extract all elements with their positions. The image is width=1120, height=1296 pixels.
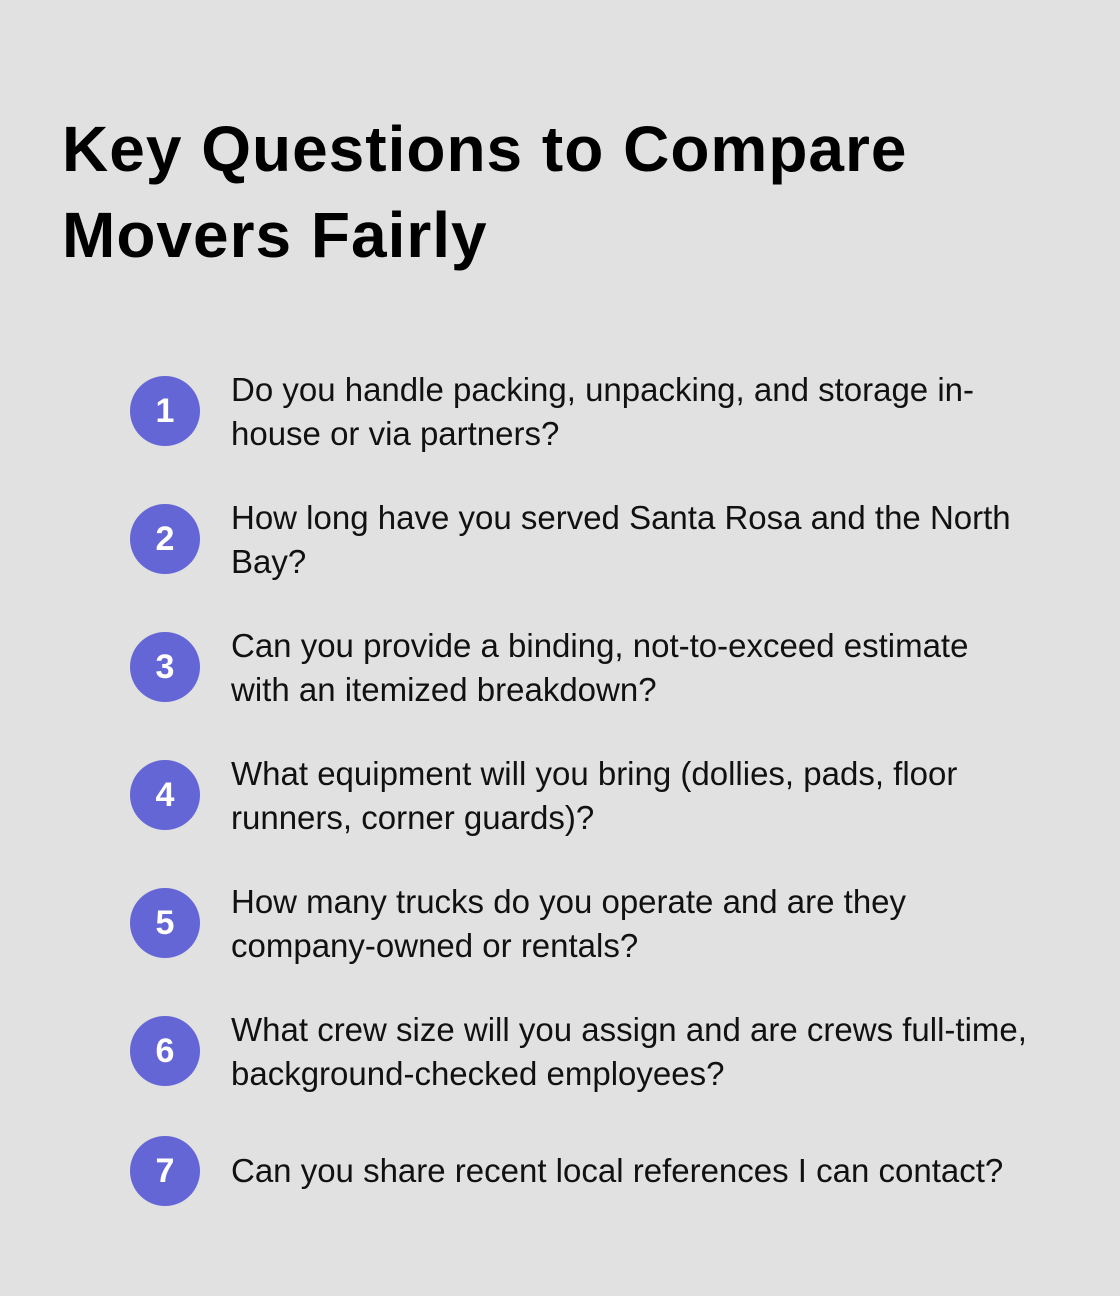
item 5	[130, 883, 906, 964]
item 5: How many trucks do you operate and are they	[231, 883, 906, 920]
item 1: Do you handle packing, unpacking, and storage in-	[231, 371, 974, 408]
item 4	[130, 755, 957, 836]
item 3: Can you provide a binding, not-to-exceed estimate	[231, 627, 968, 664]
item 3: with an itemized breakdown?	[231, 671, 657, 708]
item 2: Bay?	[231, 543, 306, 580]
item 6: 6	[156, 1032, 174, 1070]
item 6: What crew size will you assign and are crews full-time,	[231, 1011, 1027, 1048]
item 2: How long have you served Santa Rosa and the North	[231, 499, 1011, 536]
item 4: runners, corner guards)?	[231, 799, 594, 836]
item 1: house or via partners?	[231, 415, 559, 452]
title	[62, 113, 908, 271]
item 6	[130, 1011, 1027, 1092]
item 7	[130, 1136, 1003, 1206]
item 3	[130, 627, 968, 708]
item 2: 2	[156, 520, 174, 558]
item 7: Can you share recent local references I can contact?	[231, 1152, 1003, 1189]
item 1	[130, 371, 974, 452]
title: Movers Fairly	[62, 199, 488, 271]
item 3: 3	[156, 648, 174, 686]
title: Key Questions to Compare	[62, 113, 908, 185]
item 1: 1	[156, 392, 174, 430]
item 5: company-owned or rentals?	[231, 927, 638, 964]
item 2	[130, 499, 1011, 580]
item 6: background-checked employees?	[231, 1055, 724, 1092]
item 7: 7	[156, 1152, 174, 1190]
item 4: What equipment will you bring (dollies, pads, floor	[231, 755, 957, 792]
item 5: 5	[156, 904, 174, 942]
item 4: 4	[156, 776, 174, 814]
